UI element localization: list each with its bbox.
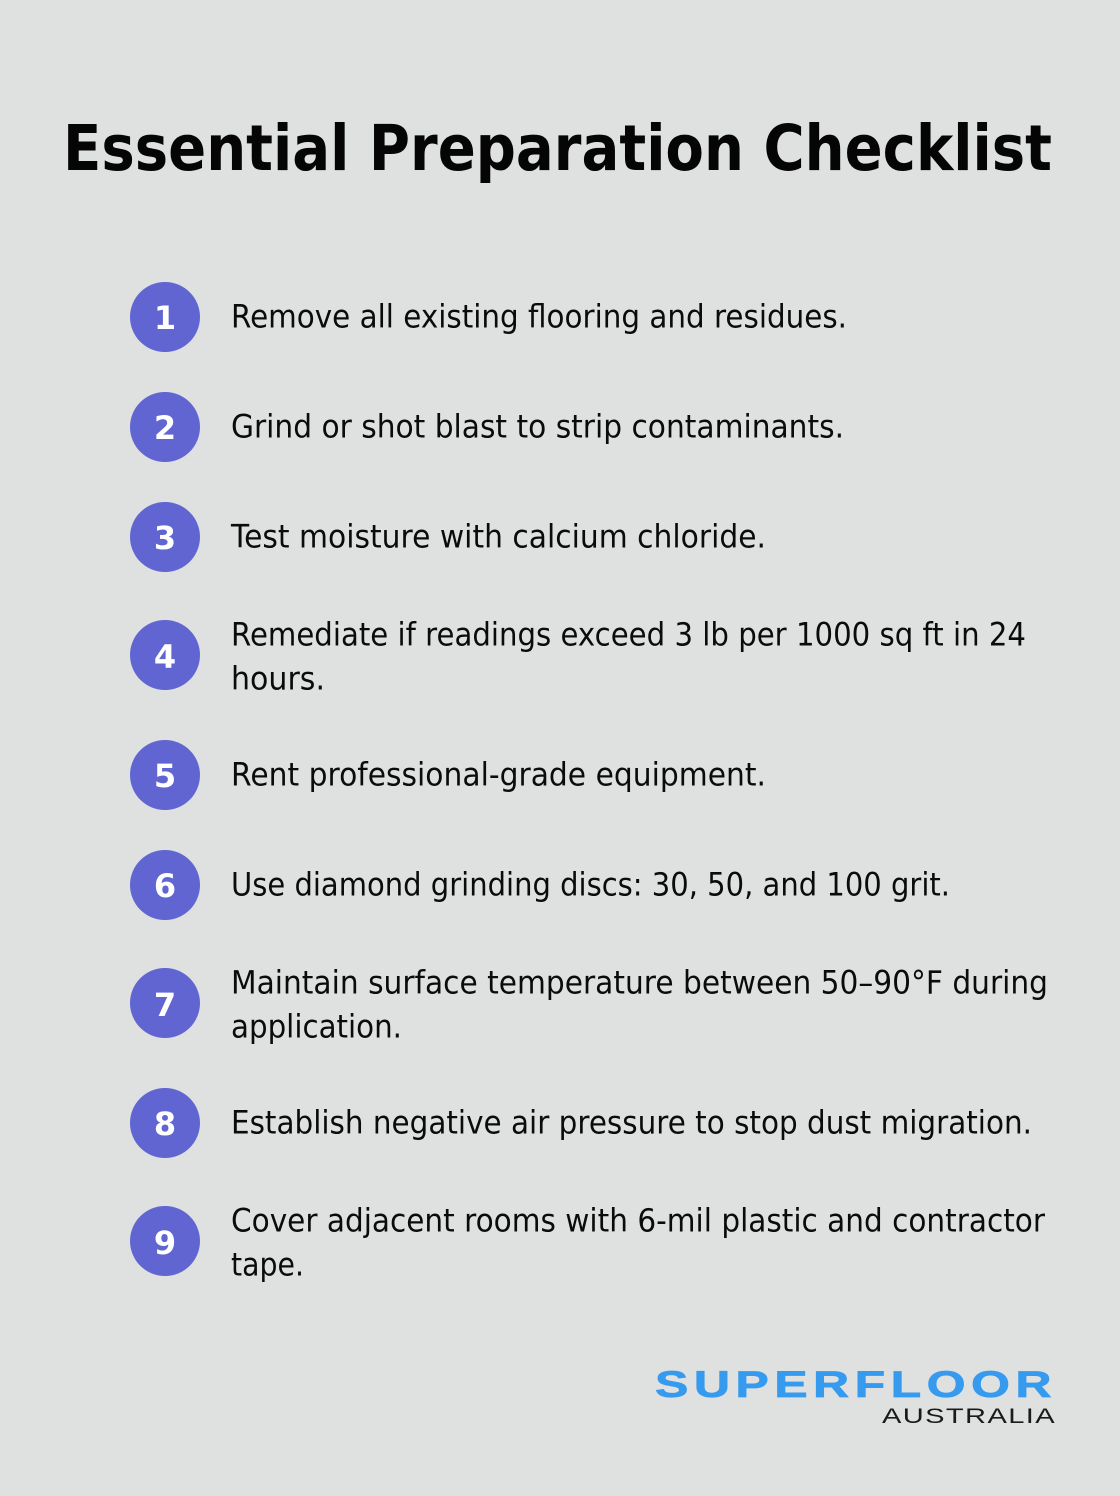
checklist item 7	[130, 964, 1048, 1046]
checklist item 9: 9	[154, 1224, 176, 1262]
checklist item 8	[130, 1088, 1032, 1158]
checklist item 9	[130, 1202, 1046, 1284]
checklist item 2	[130, 392, 844, 462]
checklist item 5: Rent professional-grade equipment.	[231, 756, 766, 794]
logo: Superfloor Australia: AUSTRALIA	[882, 1405, 1056, 1428]
checklist item 4	[130, 616, 1026, 698]
checklist item 6: Use diamond grinding discs: 30, 50, and 100 grit.	[231, 866, 950, 904]
checklist item 1: Remove all existing flooring and residues.	[231, 298, 847, 336]
checklist item 3: 3	[154, 519, 176, 557]
checklist item 6: 6	[154, 867, 176, 905]
checklist item 9: tape.	[231, 1246, 304, 1284]
checklist item 4: hours.	[231, 660, 325, 698]
checklist item 5: 5	[154, 757, 176, 795]
checklist item 2: Grind or shot blast to strip contaminants.	[231, 408, 844, 446]
checklist item 1	[130, 282, 847, 352]
checklist item 6	[130, 850, 950, 920]
checklist item 9: Cover adjacent rooms with 6-mil plastic and contractor	[231, 1202, 1046, 1240]
checklist item 4: Remediate if readings exceed 3 lb per 1000 sq ft in 24	[231, 616, 1026, 654]
logo: Superfloor Australia: SUPERFLOOR	[655, 1364, 1057, 1405]
logo: Superfloor Australia	[655, 1364, 1057, 1428]
checklist item 2: 2	[154, 409, 176, 447]
checklist item 7: 7	[154, 986, 176, 1024]
checklist item 8: 8	[154, 1105, 176, 1143]
checklist item 3	[130, 502, 766, 572]
checklist item 1: 1	[154, 299, 176, 337]
checklist item 3: Test moisture with calcium chloride.	[230, 518, 766, 556]
checklist item 5	[130, 740, 766, 810]
checklist item 7: Maintain surface temperature between 50–90°F during	[231, 964, 1048, 1002]
checklist item 7: application.	[231, 1008, 402, 1046]
checklist item 8: Establish negative air pressure to stop dust migration.	[231, 1104, 1032, 1142]
checklist item 4: 4	[154, 638, 176, 676]
